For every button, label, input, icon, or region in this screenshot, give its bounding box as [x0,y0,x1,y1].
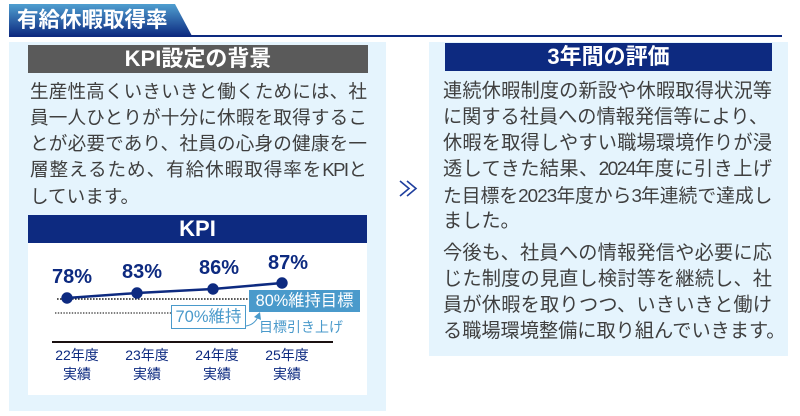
heading: evaluation [445,43,772,71]
heading: evaluation: 3年間の評価 [547,44,670,69]
title tab [9,4,782,37]
line chart: 25年度 [265,347,309,363]
line chart: 実績 [273,366,301,382]
text block: outlook: じた制度の見直し検討等を継続し、社 [443,269,772,290]
label: 70% maintain [171,305,246,329]
line chart [52,252,333,382]
text block: background [30,81,367,207]
text block: evaluation: ました。 [443,211,520,232]
line chart: 実績 [133,366,161,382]
text block: evaluation: に関する社員への情報発信等により、 [443,107,768,128]
text block: evaluation: 休暇を取得しやすい職場環境作りが浸 [443,133,772,154]
text block: evaluation: 連続休暇制度の新設や休暇取得状況等 [443,81,772,102]
text block: background: 員一人ひとりが十分に休暇を取得するこ [30,107,367,128]
line chart: 83% [122,261,162,283]
arrow: double chevron [400,180,418,197]
panel: KPI background [9,42,386,411]
label: 70% maintain: 70%維持 [175,308,242,326]
line chart: 実績 [203,366,231,382]
panel: three-year evaluation [429,42,788,356]
text block: outlook: 今後も、社員への情報発信や必要に応 [443,243,772,264]
text block: outlook: 員が休暇を取りつつ、いきいきと働け [443,295,772,316]
line chart: 23年度 [125,347,169,363]
line chart: 86% [199,257,239,279]
label: target raised: 目標引き上げ [259,319,343,335]
line chart: 実績 [63,366,91,382]
heading: KPI background [28,45,368,73]
text block: evaluation: た目標を2023年度から3年連続で達成し [443,185,772,206]
heading: KPI [28,215,367,243]
text block: background: 層整えるため、有給休暇取得率をKPIと [30,159,367,180]
text block: outlook: る職場環境整備に取り組んでいきます。 [443,321,786,342]
heading: KPI: KPI [179,216,216,241]
panel: KPI chart [28,215,367,395]
text block: evaluation: 透してきた結果、2024年度に引き上げ [443,159,772,180]
line chart: 78% [52,266,92,288]
label: 80% target: 80%維持目標 [256,292,353,310]
line chart: 87% [268,252,308,274]
text block: evaluation [443,80,772,232]
text block: background: 生産性高くいきいきと働くためには、社 [30,81,367,102]
text block: outlook [443,242,786,342]
heading: KPI background: KPI設定の背景 [125,46,271,71]
text block: background: とが必要であり、社員の心身の健康を一 [30,133,367,154]
line chart: 24年度 [195,347,239,363]
text block: background: しています。 [30,186,139,207]
line chart: 22年度 [55,347,99,363]
title tab: 有給休暇取得率 [17,8,168,32]
